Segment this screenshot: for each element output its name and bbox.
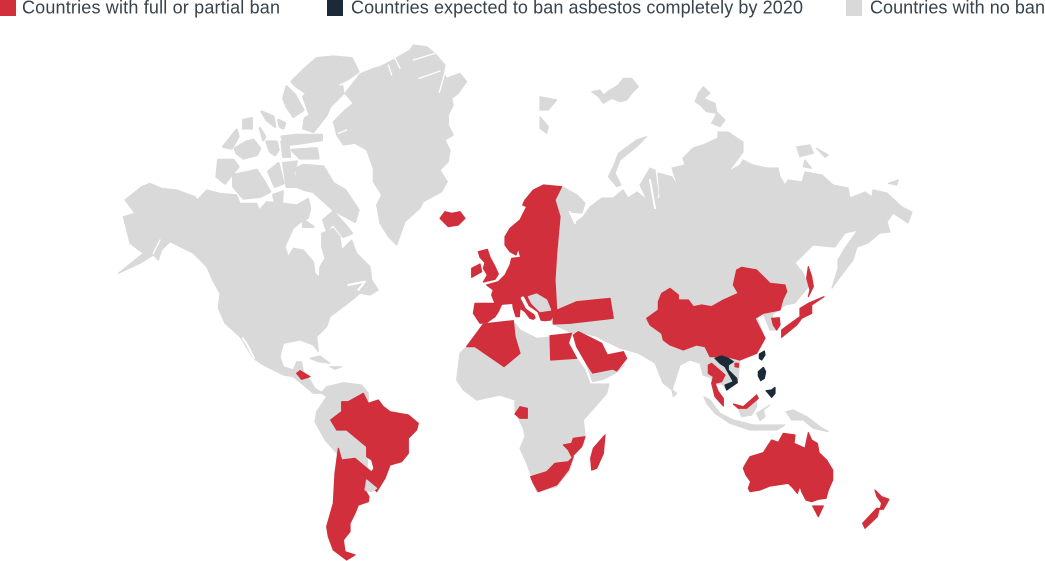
Mozambique bbox=[563, 437, 585, 457]
countries with a ban: Asia bbox=[647, 267, 824, 408]
Saudi Arabia, UAE and Oman bbox=[573, 332, 627, 373]
Ireland bbox=[472, 264, 482, 277]
Philippines (expected ban) bbox=[758, 351, 775, 397]
Chile and Argentina bbox=[327, 448, 373, 560]
landmass: Eurasia bbox=[548, 132, 912, 390]
Brazil bbox=[331, 393, 418, 492]
countries with a ban: Europe and Middle East bbox=[440, 185, 627, 373]
Madagascar bbox=[591, 435, 605, 470]
landmass: North and South America bbox=[118, 183, 378, 483]
countries with a ban: southern Africa bbox=[515, 407, 605, 492]
Japan bbox=[782, 297, 824, 337]
El Salvador and Honduras bbox=[297, 371, 310, 379]
Yemen bbox=[587, 365, 624, 382]
Egypt bbox=[550, 333, 577, 360]
Britain bbox=[478, 249, 498, 282]
South Korea bbox=[772, 318, 780, 330]
landmass: Greenland bbox=[333, 45, 467, 245]
Australia bbox=[743, 433, 833, 502]
northern Borneo bbox=[733, 395, 758, 408]
Thailand and Malay peninsula bbox=[708, 363, 725, 406]
Turkey bbox=[553, 298, 613, 324]
legend bbox=[0, 0, 1045, 18]
Tasmania bbox=[813, 506, 823, 517]
Vietnam (expected ban) bbox=[715, 356, 737, 390]
Hainan bbox=[735, 363, 738, 367]
Balkans no-ban patch bbox=[528, 294, 551, 312]
Gabon bbox=[515, 407, 527, 418]
New Zealand bbox=[863, 490, 889, 528]
landmass: Africa bbox=[457, 323, 624, 492]
Algeria bbox=[467, 321, 520, 367]
landmass: Arctic Russian islands bbox=[540, 78, 898, 187]
Sakhalin bbox=[807, 267, 813, 297]
South Africa bbox=[531, 457, 573, 492]
countries with a ban: Australia and New Zealand bbox=[743, 433, 889, 528]
China bbox=[647, 267, 787, 360]
landmass: Arctic Canadian islands bbox=[217, 57, 358, 237]
Uruguay (no ban) bbox=[365, 480, 377, 492]
landmass: Southeast Asia islands bbox=[672, 389, 828, 432]
mainland Europe with Spain and Italy bbox=[473, 185, 562, 323]
world map bbox=[118, 45, 912, 560]
countries with a ban: the Americas bbox=[297, 371, 418, 560]
Iceland bbox=[440, 212, 465, 227]
